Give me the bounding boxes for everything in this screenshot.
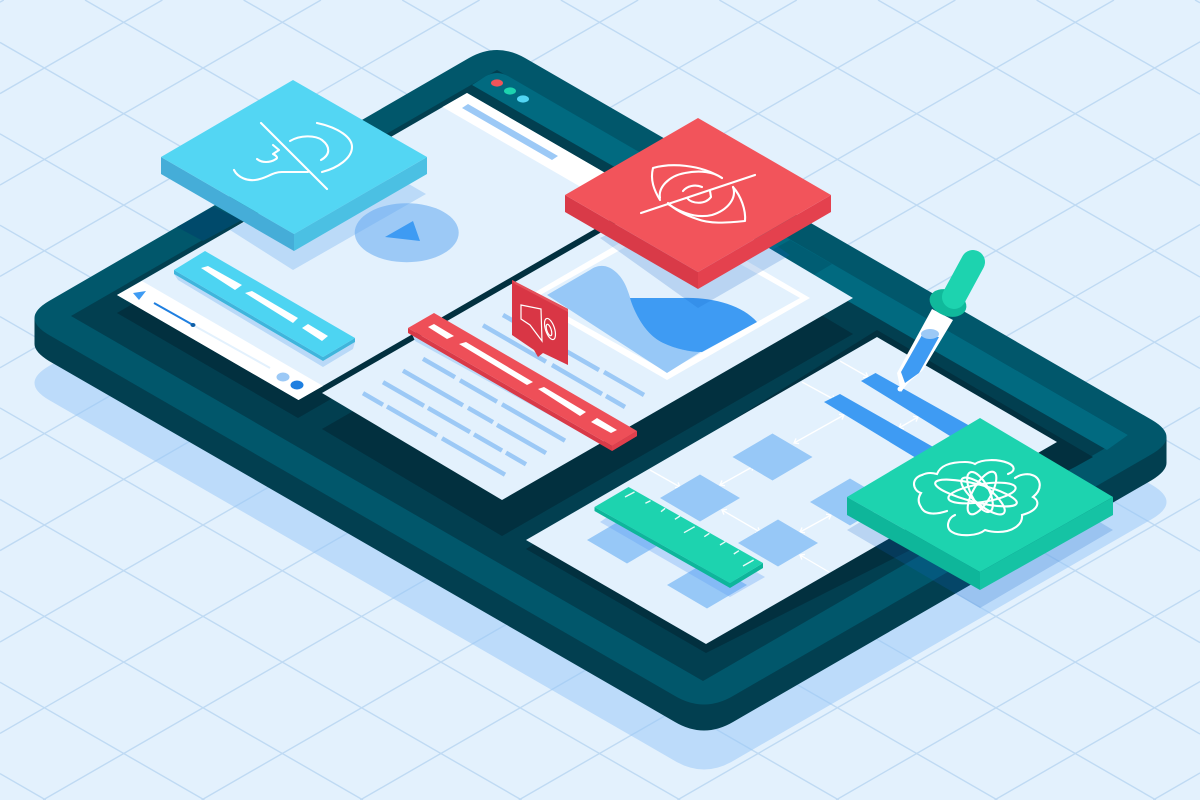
green card shadow (847, 450, 1113, 608)
video player controls (117, 281, 323, 400)
cyan card shadow on bezel (177, 207, 242, 241)
red card shadow (600, 190, 790, 308)
tablet recessed floor (71, 70, 1128, 681)
icon: crossed-out ear (234, 123, 352, 189)
image frame (525, 215, 810, 380)
caption bar shadow (174, 274, 355, 367)
red card shadow on bezel (772, 240, 832, 276)
cyan card shadow on page (230, 170, 426, 270)
ruler shadow (600, 500, 765, 597)
icon: crossed-out eye (641, 165, 755, 223)
red bar shadow (412, 334, 606, 447)
icon: tangled brain (914, 460, 1040, 535)
ruler (594, 487, 763, 588)
panel: flowchart page (526, 337, 1057, 644)
tablet side wall (34, 318, 1166, 730)
panel: chart and article page (322, 191, 853, 500)
play button (355, 203, 459, 262)
area chart (547, 266, 757, 373)
cyan deaf card (161, 80, 427, 251)
browser traffic light dots (491, 79, 529, 103)
panel: video page (117, 93, 648, 400)
page shadows on tablet floor (117, 111, 1093, 653)
flowchart connectors (650, 361, 918, 572)
cyan caption bar (174, 251, 355, 361)
green cognitive card (847, 418, 1113, 590)
flowchart nodes (587, 434, 890, 608)
tablet top bezel (34, 50, 1166, 704)
video page header (442, 93, 648, 212)
article text lines (363, 315, 644, 475)
icon: eyedropper (897, 262, 973, 392)
icon: audio description flag (512, 280, 568, 365)
tablet ground shadow (34, 115, 1166, 770)
red caption bar (408, 313, 637, 451)
flowchart blue bars (824, 373, 970, 458)
red blind card (565, 118, 831, 289)
tablet far wall highlight (472, 73, 1128, 450)
